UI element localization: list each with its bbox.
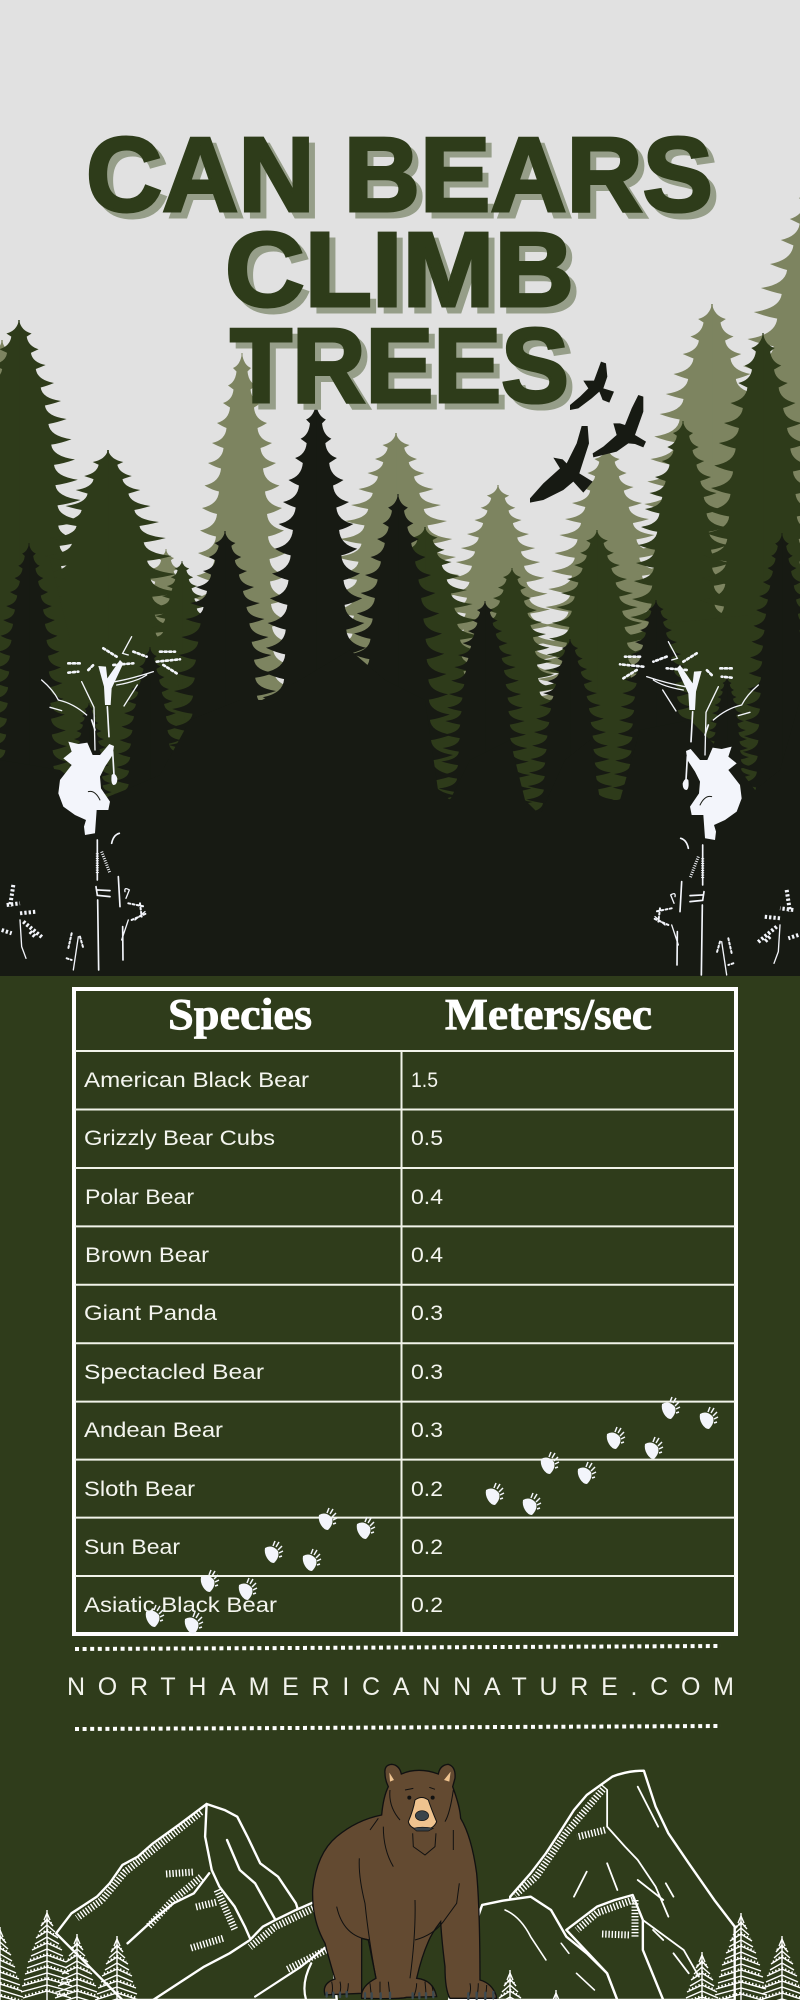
title — [86, 116, 713, 425]
illustration: small white fir trees — [0, 1910, 800, 2000]
table rows: species names: Brown Bear — [85, 1244, 209, 1267]
table rows: speed values: 0.3 — [411, 1419, 443, 1442]
title: CLIMB — [225, 211, 574, 329]
table rows: species names: Sloth Bear — [84, 1478, 195, 1501]
panel: hero sky background — [0, 0, 800, 977]
panel: lower green section — [0, 976, 800, 2000]
table rows: speed values — [411, 1069, 443, 1617]
table rows: species names: Giant Panda — [84, 1302, 217, 1325]
forest: middle layer of green fir trees — [0, 320, 800, 880]
table rows: speed values: 0.3 — [411, 1361, 443, 1384]
table header — [168, 990, 652, 1039]
table rows: species names: Spectacled Bear — [84, 1361, 264, 1384]
table rows: speed values: 0.2 — [411, 1536, 443, 1559]
table rows: speed values: 0.2 — [411, 1478, 443, 1501]
icon: white bear climbing tree, left — [2, 637, 180, 970]
table rows: species names: Andean Bear — [84, 1419, 223, 1442]
illustration: white line-art mountains — [56, 1771, 735, 2000]
dotted line below website — [75, 1726, 721, 1729]
table rows: species names — [84, 1069, 309, 1617]
title: TREES — [230, 307, 569, 425]
table rows: species names: Sun Bear — [84, 1536, 180, 1559]
table rows: species names: American Black Bear — [84, 1069, 309, 1092]
table header: Species — [168, 990, 312, 1039]
table rows: species names: Asiatic Black Bear — [84, 1594, 277, 1617]
table rows: speed values: 0.3 — [411, 1302, 443, 1325]
table rows: speed values: 0.4 — [411, 1244, 443, 1267]
website address: NORTHAMERICANNATURE.COM — [67, 1673, 734, 1701]
icon: white bear climbing tree, right — [620, 642, 798, 975]
table rows: species names: Polar Bear — [85, 1186, 194, 1209]
table rows: speed values: 1.5 — [411, 1069, 438, 1092]
table: bear climbing speeds — [74, 989, 736, 1634]
table header: Meters/sec — [445, 990, 652, 1039]
table rows: speed values: 0.4 — [411, 1186, 443, 1209]
title: CAN BEARS — [86, 116, 713, 234]
table rows: species names: Grizzly Bear Cubs — [84, 1127, 275, 1150]
mountain ridge hatching — [77, 1787, 635, 1970]
dotted line above website — [75, 1646, 721, 1649]
forest: back layer of olive fir trees — [0, 180, 800, 853]
illustration: standing brown bear — [313, 1764, 497, 1999]
table rows: speed values: 0.2 — [411, 1594, 443, 1617]
table rows: speed values: 0.5 — [411, 1127, 443, 1150]
forest: front layer of dark fir trees and ground — [0, 403, 800, 977]
icon: three flying birds — [530, 362, 646, 503]
icon: trail of bear paw prints — [146, 1397, 718, 1634]
